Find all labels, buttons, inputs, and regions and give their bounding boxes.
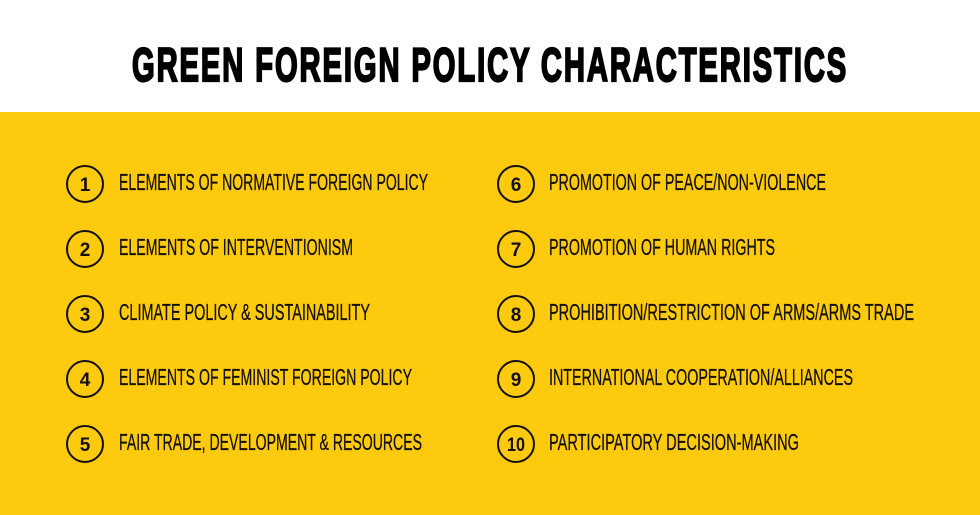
list item 3	[67, 296, 370, 332]
list item 9	[498, 361, 853, 397]
list item 4: 4	[80, 370, 91, 391]
list item 10: 10	[507, 435, 525, 456]
list item 9: 9	[511, 370, 521, 391]
list item 6: 6	[511, 175, 521, 196]
list item 3: 3	[80, 305, 90, 326]
list item 1: ELEMENTS OF NORMATIVE FOREIGN POLICY	[119, 169, 428, 195]
list item 5: 5	[80, 435, 91, 456]
list item 3: CLIMATE POLICY & SUSTAINABILITY	[119, 299, 370, 325]
list item 2	[67, 231, 353, 267]
list item 10	[498, 426, 799, 462]
title: GREEN FOREIGN POLICY CHARACTERISTICS	[132, 40, 846, 92]
panel: yellow background	[0, 112, 980, 515]
list item 4	[67, 361, 412, 397]
list item 10: PARTICIPATORY DECISION-MAKING	[549, 429, 799, 455]
list item 5	[67, 426, 422, 462]
list item 7: PROMOTION OF HUMAN RIGHTS	[549, 234, 775, 260]
list item 4: ELEMENTS OF FEMINIST FOREIGN POLICY	[119, 364, 412, 390]
list item 1	[67, 166, 428, 202]
list item 7: 7	[511, 240, 521, 261]
list item 8: 8	[511, 305, 521, 326]
list item 2: ELEMENTS OF INTERVENTIONISM	[119, 234, 353, 260]
list item 7	[498, 231, 775, 267]
list item 1: 1	[80, 175, 91, 196]
list item 2: 2	[80, 240, 90, 261]
list item 5: FAIR TRADE, DEVELOPMENT & RESOURCES	[119, 429, 422, 455]
list item 6	[498, 166, 826, 202]
list item 8	[498, 296, 914, 332]
